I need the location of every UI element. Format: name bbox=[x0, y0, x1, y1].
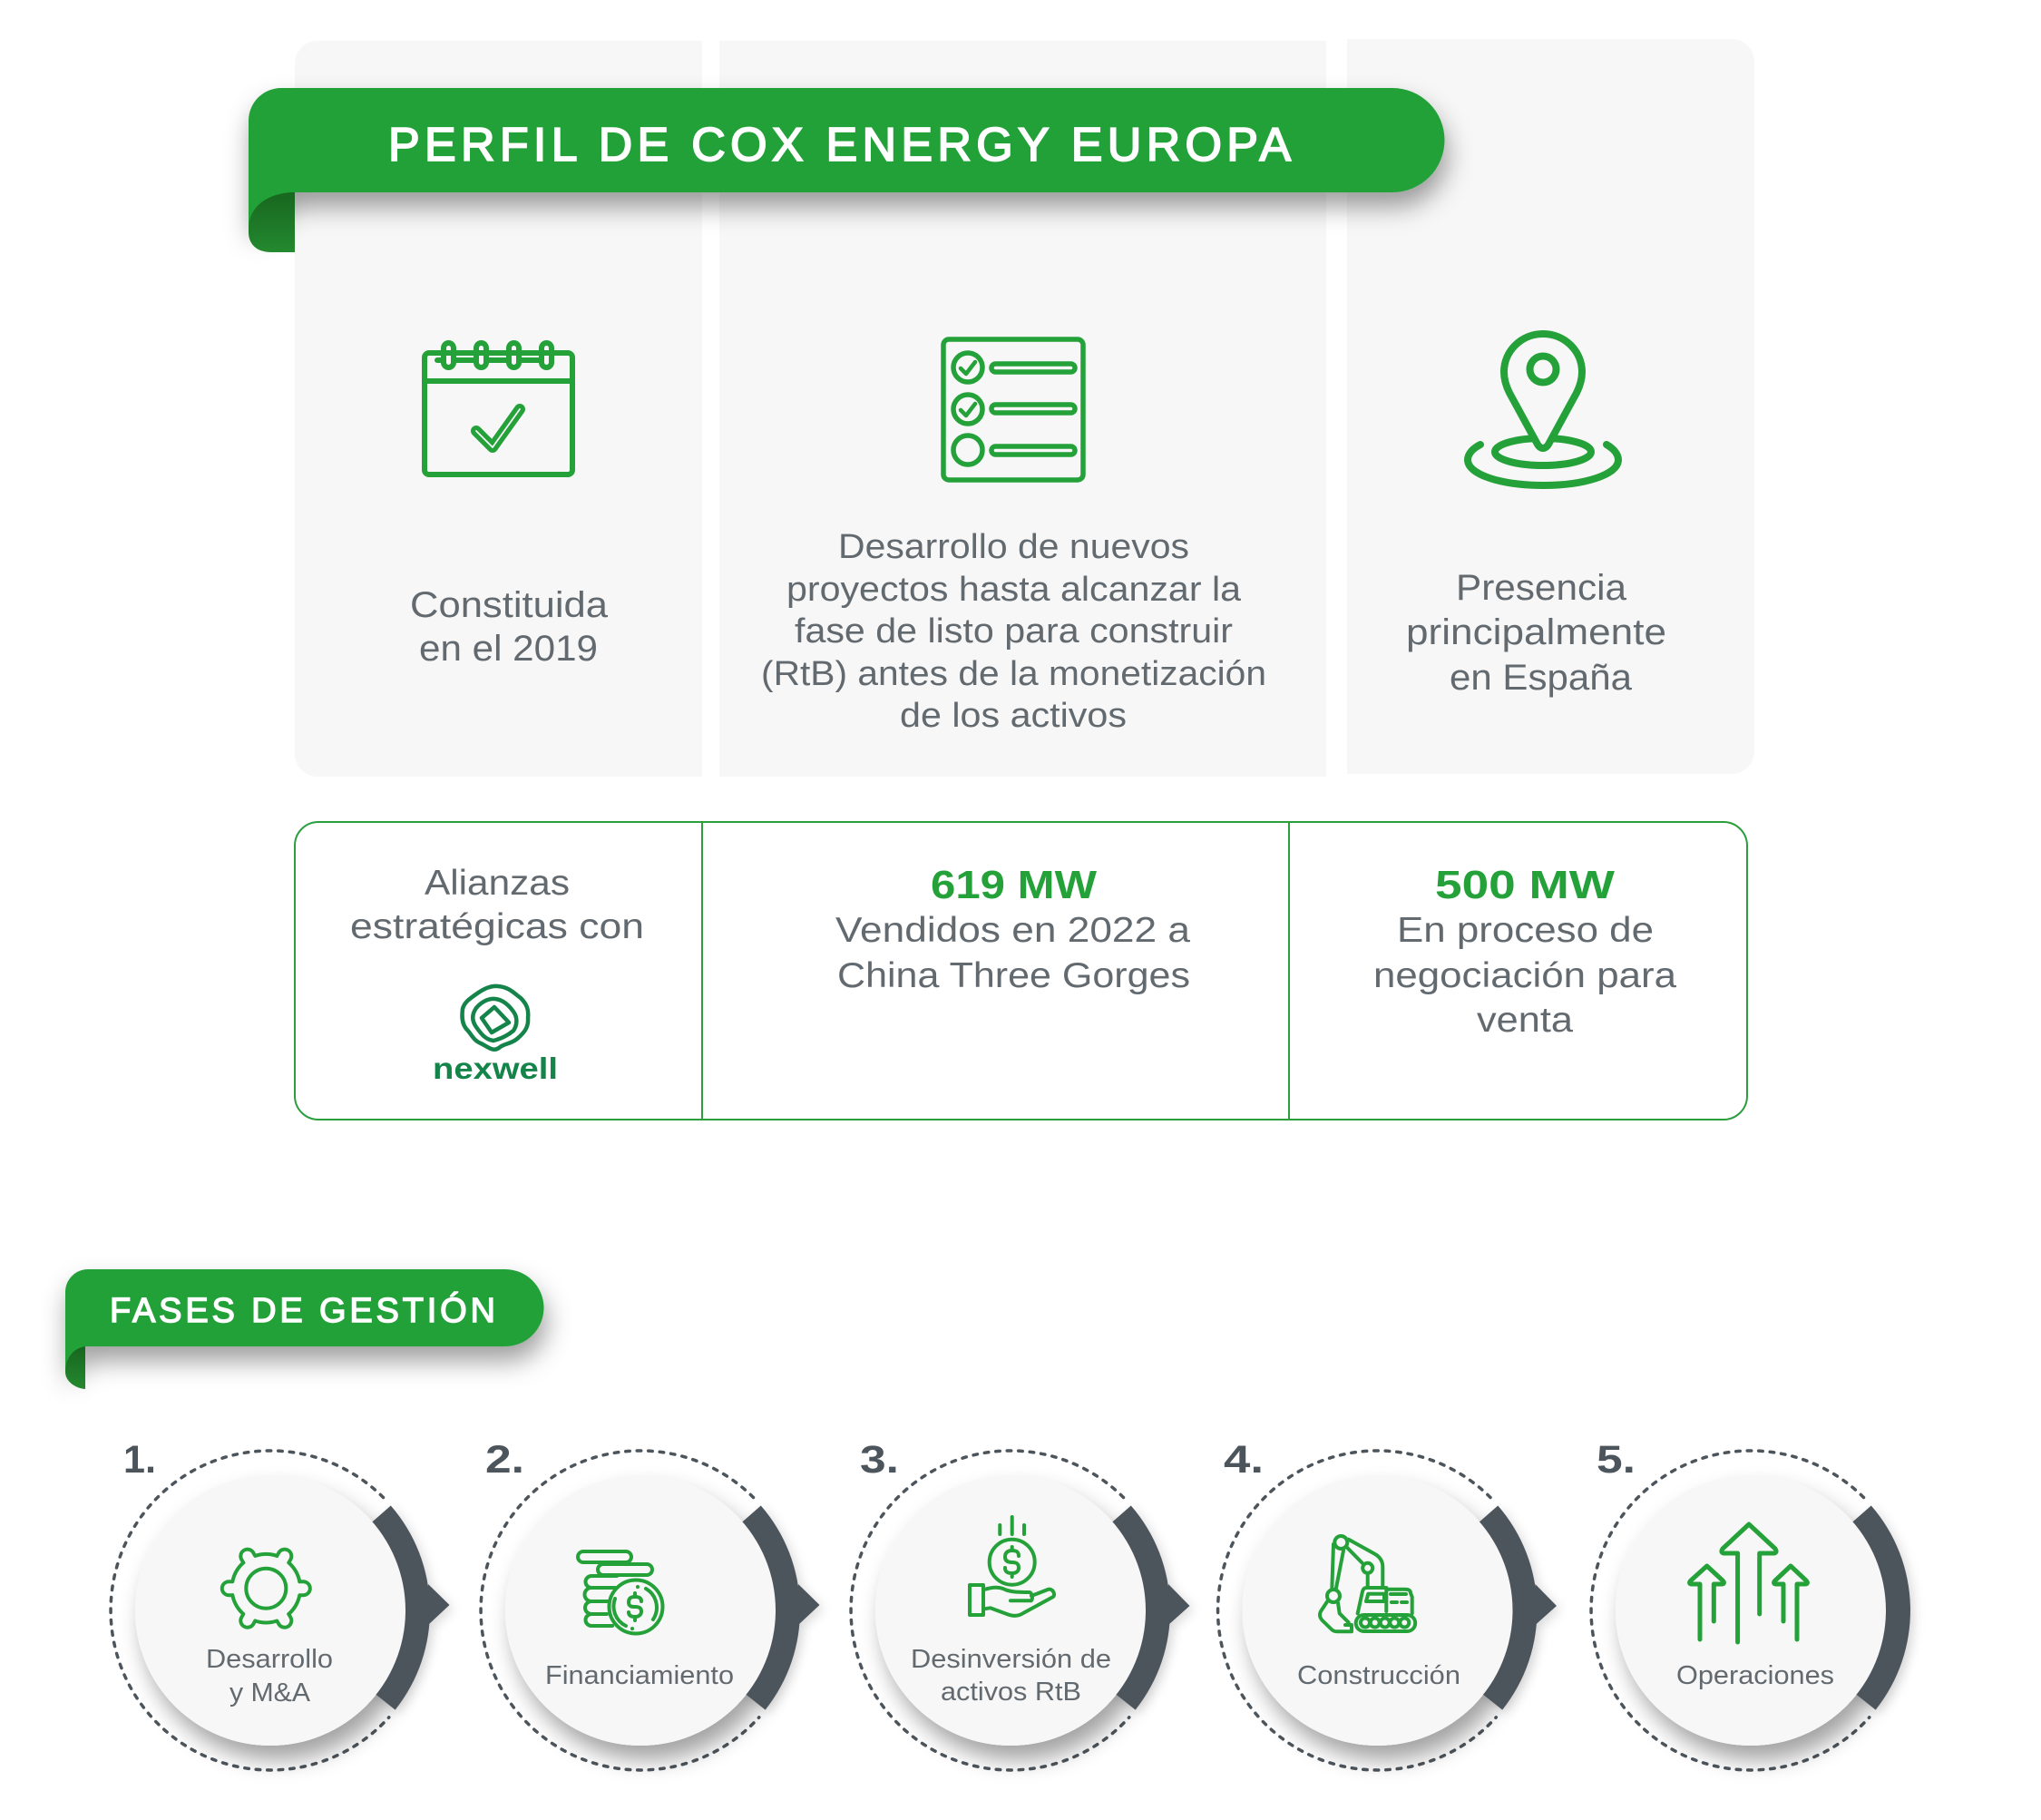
text: desarrollo de nuevos proyectos: Desarrollo de nuevos bbox=[838, 528, 1189, 566]
stat: 619 MW: China Three Gorges bbox=[837, 956, 1190, 995]
label 1: Desarrollo bbox=[206, 1645, 333, 1674]
number 1: 1. bbox=[123, 1438, 156, 1482]
icon: checklist bbox=[943, 339, 1083, 480]
ring 3 bbox=[851, 1451, 1190, 1770]
icon: coins bbox=[578, 1551, 662, 1633]
text: constituida: Constituida bbox=[410, 585, 609, 625]
icon: calendar with check bbox=[425, 343, 572, 475]
heading: fases de gestion: FASES DE GESTIÓN bbox=[110, 1291, 495, 1330]
stat: 619 MW: Vendidos en 2022 a bbox=[835, 911, 1190, 950]
label 4: Construcción bbox=[1297, 1661, 1460, 1690]
label 5: Operaciones bbox=[1676, 1661, 1834, 1690]
logo: nexwell bbox=[433, 986, 558, 1085]
label 3: Desinversión de bbox=[911, 1645, 1111, 1674]
icon: growth arrows bbox=[1690, 1524, 1807, 1642]
title banner bbox=[249, 88, 1444, 252]
text: desarrollo de nuevos proyectos: de los activos bbox=[900, 697, 1127, 735]
heading: perfil: PERFIL DE COX ENERGY EUROPA bbox=[388, 119, 1291, 171]
text: desarrollo de nuevos proyectos: proyectos hasta alcanzar la bbox=[786, 571, 1242, 609]
icon: excavator bbox=[1320, 1536, 1415, 1631]
stat: 500 MW: negociación para bbox=[1373, 956, 1676, 995]
ring 2 bbox=[481, 1451, 820, 1770]
stat: 500 MW: En proceso de bbox=[1397, 911, 1654, 950]
phase 1 bbox=[111, 1438, 450, 1770]
fases banner bbox=[65, 1269, 544, 1389]
text: alianzas: Alianzas bbox=[425, 864, 570, 903]
label 3: activos RtB bbox=[941, 1678, 1081, 1707]
text: alianzas: estratégicas con bbox=[350, 907, 644, 946]
text: desarrollo de nuevos proyectos: (RtB) antes de la monetización bbox=[761, 655, 1266, 693]
text: desarrollo de nuevos proyectos bbox=[761, 528, 1266, 735]
stat: 500 MW: venta bbox=[1477, 1001, 1573, 1040]
number 4: 4. bbox=[1224, 1438, 1264, 1482]
ring 1 bbox=[111, 1451, 450, 1770]
icon: location pin bbox=[1468, 334, 1618, 485]
text: constituida: en el 2019 bbox=[419, 629, 598, 669]
icon: hand with coin bbox=[970, 1517, 1054, 1616]
ring 4 bbox=[1218, 1451, 1557, 1770]
stats table bbox=[295, 822, 1747, 1120]
phase 5 bbox=[1591, 1438, 1910, 1770]
text: presencia principalmente: Presencia bbox=[1456, 568, 1627, 608]
phase 3 bbox=[851, 1438, 1190, 1770]
text: alianzas bbox=[350, 864, 644, 946]
text: constituida bbox=[410, 585, 609, 669]
number 2: 2. bbox=[485, 1438, 524, 1482]
text: presencia principalmente: en España bbox=[1450, 658, 1633, 698]
icon: gear bbox=[222, 1538, 310, 1639]
panel: desarrollo de proyectos bbox=[719, 41, 1326, 777]
phase 2 bbox=[481, 1438, 820, 1770]
text: presencia principalmente bbox=[1406, 568, 1666, 698]
text: nexwell: nexwell bbox=[433, 1052, 558, 1085]
ring 5 bbox=[1591, 1451, 1910, 1770]
number 3: 3. bbox=[860, 1438, 899, 1482]
stat: 500 MW: 500 MW bbox=[1435, 863, 1616, 907]
stat: 619 MW: 619 MW bbox=[931, 863, 1098, 907]
number 5: 5. bbox=[1597, 1438, 1636, 1482]
text: desarrollo de nuevos proyectos: fase de listo para construir bbox=[795, 612, 1233, 651]
stat: 500 MW bbox=[1373, 863, 1676, 1040]
panel: presencia bbox=[1347, 39, 1754, 774]
label 2: Financiamiento bbox=[545, 1661, 734, 1690]
text: presencia principalmente: principalmente bbox=[1406, 612, 1666, 652]
label 3 bbox=[911, 1645, 1111, 1707]
label 1: y M&A bbox=[229, 1678, 311, 1707]
phase 4 bbox=[1218, 1438, 1557, 1770]
panel: constituida bbox=[295, 41, 702, 777]
label 1 bbox=[206, 1645, 333, 1707]
stat: 619 MW bbox=[835, 863, 1190, 995]
